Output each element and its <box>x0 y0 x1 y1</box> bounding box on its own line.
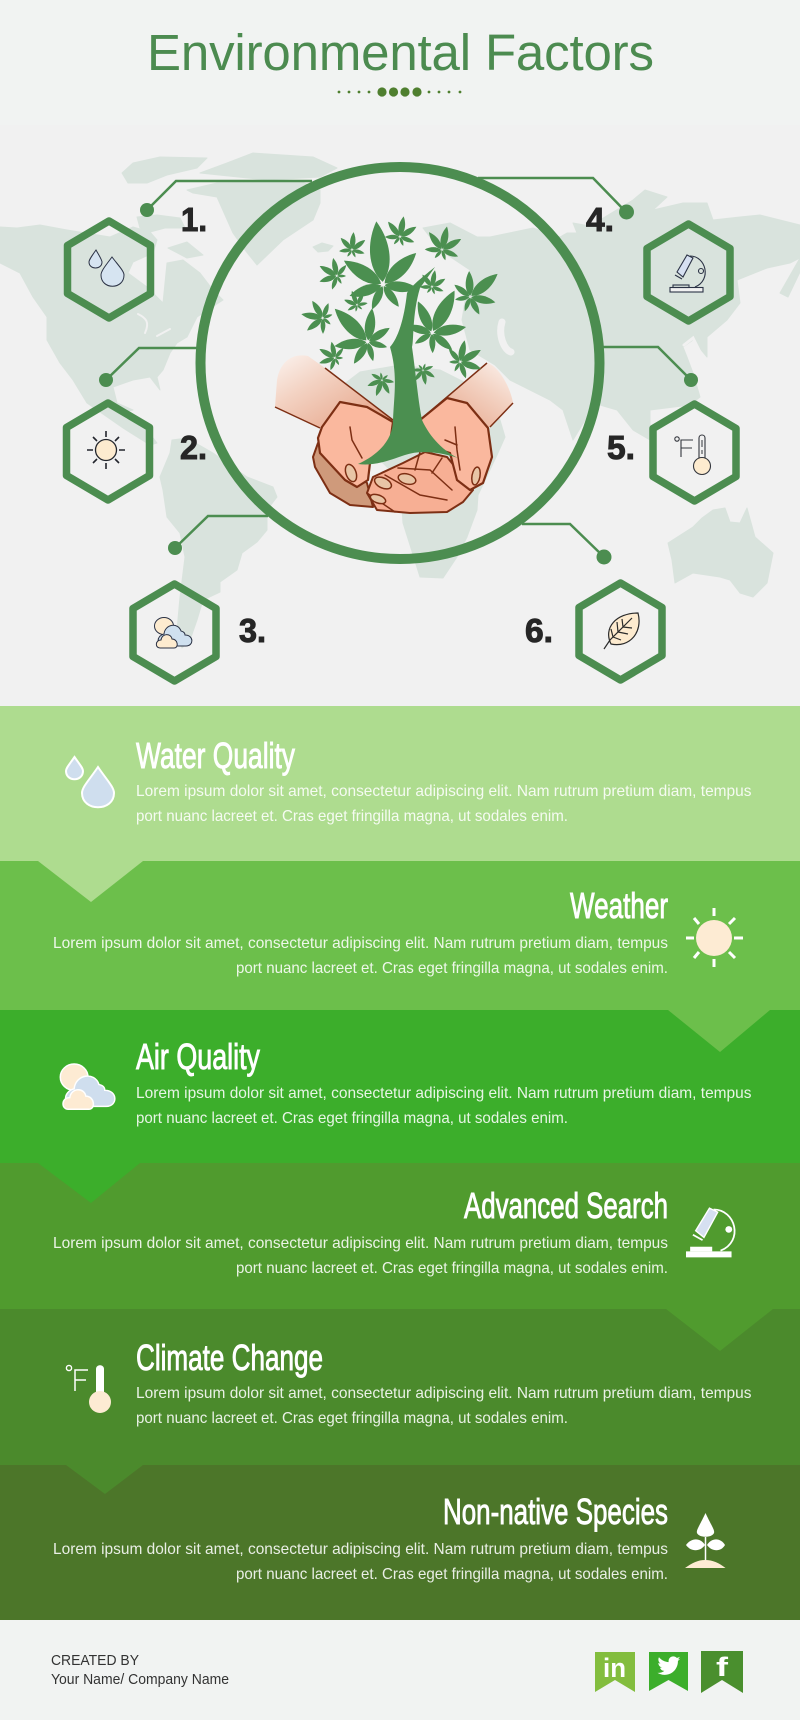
left hand <box>318 402 393 487</box>
lower left hand <box>313 443 373 507</box>
body text <box>53 1235 668 1277</box>
tree trunk <box>358 267 458 465</box>
connector 1 <box>140 181 312 217</box>
heading: Weather <box>570 885 668 926</box>
icon 6: leaf hexagon <box>579 583 662 680</box>
body text <box>53 935 668 977</box>
heading: Air Quality <box>136 1036 260 1077</box>
clasped fingers <box>367 452 473 513</box>
number 6: 6. <box>525 612 553 649</box>
body text: Lorem ipsum dolor sit amet, consectetur adipiscing elit. Nam rutrum pretium diam, tempus <box>136 783 752 800</box>
number 2: 2. <box>180 429 207 466</box>
body text: port nuanc lacreet et. Cras eget fringilla magna, ut sodales enim. <box>136 808 568 825</box>
right hand <box>420 398 492 490</box>
heading: Climate Change <box>136 1337 323 1378</box>
connector 5 <box>602 347 698 387</box>
footer credit: Your Name/ Company Name <box>51 1671 229 1688</box>
body text: Lorem ipsum dolor sit amet, consectetur adipiscing elit. Nam rutrum pretium diam, tempus <box>53 1541 668 1558</box>
social badge: linkedin: in <box>603 1653 626 1683</box>
number 3: 3. <box>239 612 266 649</box>
heading: Advanced Search <box>464 1185 668 1226</box>
panel: weather <box>0 861 800 1052</box>
footer background <box>0 1620 800 1720</box>
icon: microscope <box>686 1208 735 1257</box>
panel: air quality <box>0 1010 800 1203</box>
icon: sprout <box>685 1513 726 1568</box>
footer credit: CREATED BY <box>51 1652 139 1669</box>
icon: water drops <box>66 757 114 807</box>
body text: port nuanc lacreet et. Cras eget fringilla magna, ut sodales enim. <box>136 1110 568 1127</box>
map lakes and inlets <box>138 314 700 352</box>
left arm <box>275 355 393 428</box>
title: Environmental Factors <box>147 24 654 81</box>
number 4: 4. <box>586 201 614 238</box>
pointer <box>666 1309 773 1351</box>
social badge: twitter <box>649 1652 688 1691</box>
world map background <box>0 153 800 648</box>
heading: Water Quality <box>136 735 295 776</box>
body text <box>136 1385 752 1427</box>
header band <box>0 0 800 125</box>
pointer <box>38 861 143 902</box>
number 5: 5. <box>607 429 635 466</box>
right arm <box>420 363 513 427</box>
body text: Lorem ipsum dolor sit amet, consectetur adipiscing elit. Nam rutrum pretium diam, tempus <box>136 1085 752 1102</box>
icon: clouds <box>60 1064 115 1109</box>
pointer <box>38 1163 140 1203</box>
footer credit <box>51 1652 229 1688</box>
tree foliage <box>298 213 512 400</box>
body text: Lorem ipsum dolor sit amet, consectetur adipiscing elit. Nam rutrum pretium diam, tempus <box>53 1235 668 1252</box>
body text: port nuanc lacreet et. Cras eget fringilla magna, ut sodales enim. <box>136 1410 568 1427</box>
connector 4 <box>478 178 634 220</box>
panel: climate change <box>0 1309 800 1494</box>
body text: port nuanc lacreet et. Cras eget fringilla magna, ut sodales enim. <box>236 1260 668 1277</box>
body text: port nuanc lacreet et. Cras eget fringilla magna, ut sodales enim. <box>236 960 668 977</box>
icon: thermometer <box>66 1365 111 1413</box>
icon 2: sun hexagon <box>66 403 150 500</box>
pointer <box>668 1010 770 1052</box>
social badge: facebook: f <box>716 1652 729 1682</box>
heading: Non-native Species <box>443 1491 668 1532</box>
central ring <box>200 167 600 559</box>
icon 5: thermometer hexagon <box>653 404 736 501</box>
title dotted divider <box>338 87 461 97</box>
social badge: linkedin <box>595 1652 635 1692</box>
body text <box>53 1541 668 1583</box>
panel: non-native species <box>0 1465 800 1620</box>
arm outlines <box>275 363 513 428</box>
icon 1: water drops hexagon <box>68 221 150 318</box>
icon: sun <box>686 908 743 967</box>
connector 2 <box>99 348 198 387</box>
illustration: hands holding tree <box>275 213 513 513</box>
body text: Lorem ipsum dolor sit amet, consectetur adipiscing elit. Nam rutrum pretium diam, tempus <box>136 1385 752 1402</box>
panel: advanced search <box>0 1163 800 1351</box>
body text: Lorem ipsum dolor sit amet, consectetur adipiscing elit. Nam rutrum pretium diam, tempus <box>53 935 668 952</box>
icon 3: clouds hexagon <box>133 584 216 681</box>
body text <box>136 1085 752 1127</box>
number 1: 1. <box>181 201 207 238</box>
connector 6 <box>522 524 612 564</box>
panel: water quality <box>0 706 800 902</box>
connector 3 <box>168 516 268 555</box>
social badge: facebook <box>701 1651 743 1693</box>
body text <box>136 783 752 825</box>
finger creases and nails <box>343 427 482 512</box>
pointer <box>66 1465 143 1494</box>
body text: port nuanc lacreet et. Cras eget fringilla magna, ut sodales enim. <box>236 1566 668 1583</box>
icon 4: microscope hexagon <box>647 224 730 321</box>
